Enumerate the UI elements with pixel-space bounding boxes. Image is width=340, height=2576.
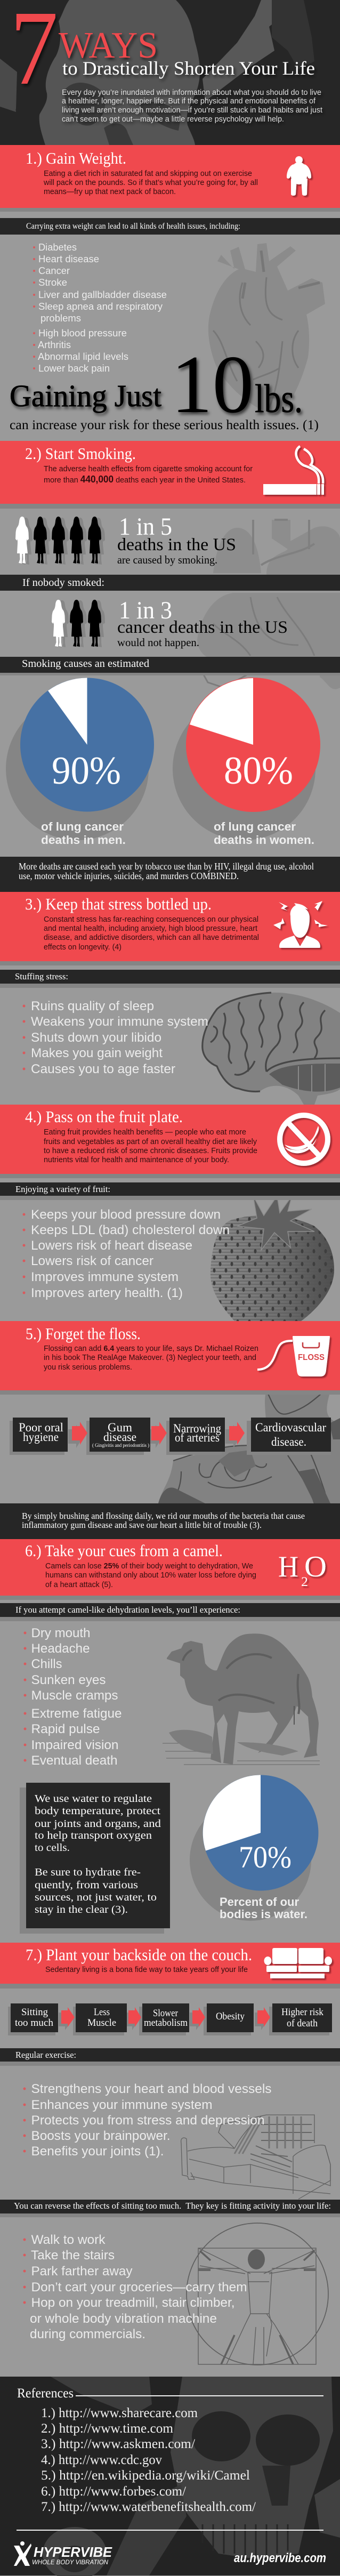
stat: 1 in 3 cancer deaths: cancer deaths in the US	[117, 618, 288, 637]
body text 1: Eating a diet rich in saturated fat and skipping out on exercise	[44, 169, 252, 178]
arrow a	[61, 2007, 75, 2027]
list: dehydration symptoms: Muscle cramps	[31, 1688, 118, 1703]
intro text: a healthier, longer, happier life. But if the physical and emotional benefits of	[62, 96, 316, 106]
bar: camel-like dehydration: If you attempt camel-like dehydration levels, you’ll experience:	[15, 1605, 240, 1615]
box: cardiovascular disease: disease.	[271, 1435, 306, 1448]
body text 2: The adverse health effects from cigarette smoking account for	[44, 464, 253, 473]
list: stress effects: Makes you gain weight	[31, 1046, 163, 1060]
box: narrowing of arteries: Narrowing	[173, 1422, 221, 1435]
bar: smoking causes	[0, 657, 340, 675]
list: health issues: High blood pressure	[38, 328, 127, 339]
bar: brushing and flossing	[0, 1503, 340, 1539]
figures: 1 in 5	[15, 517, 105, 565]
arrow d	[257, 2007, 270, 2027]
references list: 1.) http://www.sharecare.com	[41, 2406, 198, 2420]
box: higher risk of death: of death	[287, 2018, 318, 2029]
bar: enjoying fruit: Enjoying a variety of fruit:	[15, 1184, 110, 1194]
bar: stuffing stress	[0, 970, 340, 988]
list: health issues: Liver and gallbladder disease	[38, 289, 167, 300]
icon: H2O	[278, 1550, 327, 1589]
illustration: brain	[203, 993, 340, 1105]
panel: 5 forget the floss	[0, 1321, 340, 1395]
list: exercise benefits: Boosts your brainpower.	[31, 2129, 171, 2143]
body text 4: fruits and vegetables as part of an overall healthy diet are likely	[44, 1137, 257, 1146]
list: dehydration symptoms: Rapid pulse	[31, 1722, 100, 1736]
list: health issues: Stroke	[38, 277, 67, 288]
illustration: lungs lower	[197, 593, 340, 689]
pie chart: 70 percent water: 70%	[239, 1840, 292, 1874]
callout: gaining just 10 lbs: can increase your risk for these serious health issues. (1)	[10, 418, 319, 432]
icon: floss container	[257, 1336, 330, 1376]
bar: smoking causes: Smoking causes an estimated	[22, 658, 149, 670]
callout: water facts: body temperature, protect	[35, 1805, 161, 1817]
body text 4: to have a reduced risk of some chronic diseases. Fruits provide	[44, 1146, 257, 1155]
box: gum disease: Gum	[108, 1421, 132, 1434]
bar: more deaths	[0, 857, 340, 892]
bar: enjoying fruit	[0, 1182, 340, 1200]
callout: gaining just 10 lbs: 10	[171, 339, 254, 430]
box: higher risk of death	[272, 2003, 332, 2032]
pie chart: 70 percent water: bodies is water.	[220, 1907, 307, 1921]
body text 5: Flossing can add 6.4 years to your life, says Dr. Michael Roizen	[44, 1344, 258, 1353]
references list: 4.) http://www.cdc.gov	[41, 2453, 162, 2467]
icon: H2O: O	[304, 1550, 327, 1583]
icon: overweight person	[287, 156, 311, 196]
box: sitting too much: too much	[15, 2017, 53, 2028]
box: cardiovascular disease	[251, 1418, 331, 1452]
callout: gaining just 10 lbs: Gaining Just	[10, 379, 161, 413]
list: dehydration symptoms: Sunken eyes	[31, 1673, 106, 1687]
body text 4: Eating fruit provides health benefits — people who eat more	[44, 1128, 246, 1137]
list: exercise benefits: Strengthens your heart and blood vessels	[31, 2082, 272, 2096]
box: sitting too much	[11, 2003, 58, 2032]
list: fruit benefits	[22, 1207, 230, 1300]
callout: water facts: sources, not just water, to	[35, 1891, 157, 1903]
callout: water facts: stay in the clear (3).	[35, 1904, 128, 1915]
panel: 4 pass on the fruit plate	[0, 1105, 340, 1178]
list: exercise benefits: Benefits your joints (1).	[31, 2144, 164, 2159]
list: dehydration symptoms: Eventual death	[31, 1753, 117, 1768]
heading 5: 5.) Forget the floss.	[26, 1324, 141, 1343]
flowchart: sitting to higher risk of death	[8, 2003, 332, 2035]
illustration: jaw	[158, 1390, 340, 1503]
heading 4: 4.) Pass on the fruit plate.	[25, 1107, 183, 1126]
box: gum disease: ( Gingivitis and periodontitis )	[92, 1443, 149, 1448]
intro text: can’t seem to get out—maybe a little reverse psychology will help.	[62, 115, 284, 124]
list: fruit benefits: Lowers risk of cancer	[31, 1254, 153, 1268]
box: poor oral hygiene: Poor oral	[19, 1421, 63, 1434]
list: fruit benefits: Keeps your blood pressure down	[31, 1207, 221, 1222]
box: higher risk of death: Higher risk	[281, 2007, 323, 2018]
list: health issues: Diabetes	[38, 242, 77, 253]
arrow c	[192, 2007, 205, 2027]
list: health issues: Arthritis	[38, 340, 71, 350]
box: narrowing of arteries: of arteries	[175, 1431, 220, 1444]
bar: health issues: Carrying extra weight can lead to all kinds of health issues, including:	[26, 222, 240, 231]
list: exercise benefits: Enhances your immune system	[31, 2098, 212, 2112]
body text 5	[44, 1344, 258, 1372]
list: health issues: Abnormal lipid levels	[38, 351, 128, 362]
list: activity tips: Walk to work	[31, 2233, 106, 2247]
panel: header	[0, 0, 340, 145]
flowchart: oral hygiene to cardiovascular disease	[10, 1418, 331, 1455]
box: obesity: Obesity	[216, 2011, 245, 2022]
pie chart: 80 percent women: deaths in women.	[214, 833, 314, 847]
references list: 7.) http://www.waterbenefitshealth.com/	[41, 2500, 256, 2514]
illustration: footer skull and crossbones	[43, 2377, 340, 2576]
pie chart: 80 percent women: of lung cancer	[214, 820, 296, 833]
figures: 1 in 3	[52, 600, 105, 647]
stat: 1 in 5 deaths: deaths in the US	[117, 535, 236, 554]
callout: gaining just 10 lbs	[10, 339, 319, 432]
box: slower metabolism	[142, 2003, 189, 2032]
list: health issues: Sleep apnea and respiratory	[38, 301, 163, 312]
panel: 2 start smoking	[0, 441, 340, 509]
body text 3	[44, 915, 259, 952]
list: fruit benefits: Lowers risk of heart disease	[31, 1238, 192, 1253]
list: activity tips: or whole body vibration machine	[30, 2312, 217, 2326]
bar: reverse the effects: You can reverse the effects of sitting too much. They key is fitting activity into your life:	[14, 2201, 331, 2211]
icon: stressed head	[273, 901, 328, 948]
body text 3: disease, and addictive disorders, which can all have detrimental	[44, 933, 259, 942]
heading 2: 2.) Start Smoking.	[25, 444, 136, 463]
arrow 2	[151, 1422, 167, 1445]
bar: health issues	[0, 218, 340, 235]
list: stress effects: Shuts down your libido	[31, 1031, 161, 1045]
body text 2	[44, 464, 253, 485]
illustration: engraved heart	[208, 243, 325, 415]
pie chart: 90 percent men: 90%	[52, 749, 121, 793]
panel: 7 couch	[0, 1943, 340, 1989]
panel: 1 gain weight	[0, 145, 340, 212]
callout: water facts: our joints and organs, and	[35, 1818, 161, 1830]
icon: no fruit	[280, 1115, 328, 1163]
logo: Hypervibe: WHOLE BODY VIBRATION	[32, 2558, 108, 2566]
logo: Hypervibe	[14, 2541, 112, 2566]
bar: regular exercise: Regular exercise:	[15, 2050, 76, 2060]
body text 3: effects on longevity. (4)	[44, 943, 122, 952]
list: activity tips: Don’t cart your groceries—carry them	[31, 2280, 247, 2295]
list: dehydration symptoms: Dry mouth	[31, 1626, 91, 1640]
arrow 3	[229, 1422, 245, 1445]
body text 6: of a heart attack (5).	[45, 1580, 113, 1589]
heading 1: 1.) Gain Weight.	[26, 149, 126, 167]
illustration: camel	[163, 1633, 320, 1765]
logo: Hypervibe: HYPERVIBE	[34, 2544, 112, 2560]
list: stress effects: Causes you to age faster	[31, 1062, 175, 1076]
illustration: lungs upper	[213, 520, 340, 575]
arrow 1	[72, 1422, 87, 1445]
references list: 2.) http://www.time.com	[41, 2421, 174, 2436]
callout: water facts: to help transport oxygen	[35, 1830, 152, 1841]
body text 5: you risk serious problems.	[44, 1363, 132, 1372]
icon: floss container: FLOSS	[298, 1353, 325, 1362]
bar: camel-like dehydration	[0, 1603, 340, 1621]
title: subtitle: to Drastically Shorten Your Life	[62, 58, 315, 79]
list: fruit benefits: Keeps LDL (bad) cholesterol down	[31, 1223, 230, 1237]
list: health issues: Cancer	[38, 265, 70, 276]
icon: cigarette	[263, 446, 324, 495]
list: activity tips: during commercials.	[30, 2327, 145, 2341]
bar: if nobody smoked: If nobody smoked:	[22, 577, 104, 589]
illustration: vitruvian man	[187, 2223, 328, 2365]
references list	[41, 2406, 256, 2514]
callout: gaining just 10 lbs: lbs.	[255, 377, 303, 421]
list: exercise benefits: Protects you from stress and depression	[31, 2113, 264, 2128]
stat: 1 in 3 cancer deaths: would not happen.	[117, 636, 199, 649]
list: activity tips: Park farther away	[31, 2264, 132, 2279]
stat: 1 in 5 deaths: 1 in 5	[119, 513, 172, 541]
box: gum disease	[90, 1418, 150, 1452]
illustration: strawberry	[211, 1196, 334, 1321]
callout: water facts: We use water to regulate	[35, 1793, 152, 1805]
list: health issues: problems	[41, 313, 81, 324]
box: less muscle	[76, 2003, 127, 2032]
list: stress effects	[22, 999, 208, 1076]
body text 6: humans can withstand only about 10% water loss before dying	[45, 1571, 256, 1580]
body text 1: means—fry up that next pack of bacon.	[44, 187, 176, 196]
illustration: engraved couch	[181, 2115, 330, 2199]
stat: 1 in 5 deaths	[117, 513, 236, 566]
box: slower metabolism: Slower	[153, 2008, 179, 2019]
list: exercise benefits	[23, 2082, 272, 2159]
stat: 1 in 3 cancer deaths	[117, 597, 288, 649]
title: WAYS: WAYS	[59, 25, 158, 66]
box: less muscle: Muscle	[87, 2017, 116, 2028]
box: obesity	[207, 2003, 254, 2032]
bar: brushing and flossing: inflammatory gum disease and save our heart a little bit of trouble (3).	[22, 1520, 262, 1530]
pie chart: 70 percent water	[190, 1775, 319, 1921]
heading 6: 6.) Take your cues from a camel.	[25, 1541, 223, 1560]
list: stress effects: Weakens your immune system	[31, 1015, 208, 1029]
body text 6: Camels can lose 25% of their body weight to dehydration, We	[45, 1561, 253, 1571]
bar: if nobody smoked	[0, 575, 340, 591]
box: gum disease: disease	[103, 1430, 136, 1444]
bar: regular exercise	[0, 2048, 340, 2066]
list: health issues: Lower back pain	[38, 363, 110, 374]
body text 3: Constant stress has far-reaching consequences on our physical	[44, 915, 258, 924]
callout: water facts: quently, from various	[35, 1879, 138, 1891]
bar: brushing and flossing: By simply brushing and flossing daily, we rid our mouths of the bacteria that cause	[22, 1511, 305, 1521]
heading 3: 3.) Keep that stress bottled up.	[25, 895, 212, 913]
bar: more deaths: use, motor vehicle injuries, suicides, and murders COMBINED.	[19, 871, 239, 881]
pie chart: 90 percent men: of lung cancer	[41, 820, 124, 833]
body text 4: nutrients vital for health and maintenance of your body.	[44, 1155, 229, 1164]
pie chart: 70 percent water: Percent of our	[220, 1895, 299, 1909]
list: dehydration symptoms: Impaired vision	[31, 1738, 118, 1752]
illustration: skull and crossbones	[0, 0, 314, 145]
body text 4	[44, 1128, 257, 1164]
box: sitting too much: Sitting	[21, 2007, 48, 2018]
box: slower metabolism: metabolism	[144, 2017, 188, 2028]
callout: water facts: to cells.	[35, 1842, 70, 1854]
body text 7: Sedentary living is a bona fide way to take years off your life	[45, 1965, 248, 1974]
icon: couch	[264, 1948, 332, 1978]
pie chart: 80 percent women	[173, 678, 320, 847]
body text 6	[45, 1561, 256, 1589]
references list: 5.) http://en.wikipedia.org/wiki/Camel	[41, 2468, 250, 2483]
icon: H2O: H	[278, 1550, 298, 1583]
list: stress effects: Ruins quality of sleep	[31, 999, 154, 1013]
intro text	[62, 88, 323, 124]
bar: stuffing stress: Stuffing stress:	[15, 971, 68, 981]
box: narrowing of arteries	[169, 1418, 225, 1452]
box: less muscle: Less	[94, 2007, 110, 2018]
panel: 3 keep stress bottled up	[0, 892, 340, 965]
callout: water facts: Be sure to hydrate fre-	[35, 1866, 141, 1878]
body text 1	[43, 169, 258, 196]
list: activity tips: Hop on your treadmill, stair climber,	[31, 2296, 235, 2310]
box: cardiovascular disease: Cardiovascular	[255, 1421, 326, 1434]
pie chart: 90 percent men	[6, 678, 154, 847]
list: activity tips	[23, 2233, 247, 2341]
list: dehydration symptoms: Chills	[31, 1657, 62, 1671]
panel: 6 camel	[0, 1539, 340, 1600]
panel: footer	[0, 2377, 340, 2576]
list: health issues	[33, 242, 167, 374]
list: dehydration symptoms	[23, 1626, 122, 1768]
references list: 6.) http://www.forbes.com/	[41, 2484, 186, 2499]
intro text: living well aren’t enough motivation—if you’re still stuck in bad habits and just	[62, 106, 323, 115]
list: fruit benefits: Improves artery health. (1)	[31, 1286, 183, 1300]
body text 5: in his book The RealAge Makeover. (3) Neglect your teeth, and	[44, 1353, 256, 1362]
list: dehydration symptoms: Headache	[31, 1641, 90, 1656]
website url: au.hypervibe.com	[234, 2551, 326, 2565]
box: poor oral hygiene	[13, 1418, 68, 1452]
references heading: References	[17, 2386, 74, 2401]
heading 7: 7.) Plant your backside on the couch.	[26, 1945, 252, 1964]
body text 2: more than 440,000 deaths each year in the United States.	[44, 474, 246, 485]
pie chart: 80 percent women: 80%	[224, 749, 293, 793]
list: dehydration symptoms: Extreme fatigue	[31, 1706, 122, 1721]
list: health issues: Heart disease	[38, 254, 99, 264]
references list: 3.) http://www.askmen.com/	[41, 2437, 195, 2451]
stat: 1 in 3 cancer deaths: 1 in 3	[119, 597, 172, 624]
intro text: Every day you’re inundated with information about what you should do to live	[62, 88, 321, 97]
list: activity tips: Take the stairs	[31, 2248, 115, 2263]
icon: H2O: 2	[301, 1575, 308, 1589]
list: fruit benefits: Improves immune system	[31, 1270, 179, 1284]
stat: 1 in 5 deaths: are caused by smoking.	[117, 553, 217, 566]
body text 1: will pack on the pounds. So if that’s what you’re going for, by all	[43, 178, 258, 187]
pie chart: 90 percent men: deaths in men.	[41, 833, 126, 847]
box: poor oral hygiene: hygiene	[23, 1430, 59, 1444]
callout: water facts	[20, 1783, 170, 1934]
bar: reverse the effects	[0, 2200, 340, 2217]
body text 3: and mental health, including anxiety, high blood pressure, heart	[44, 924, 258, 933]
arrow b	[128, 2007, 141, 2027]
